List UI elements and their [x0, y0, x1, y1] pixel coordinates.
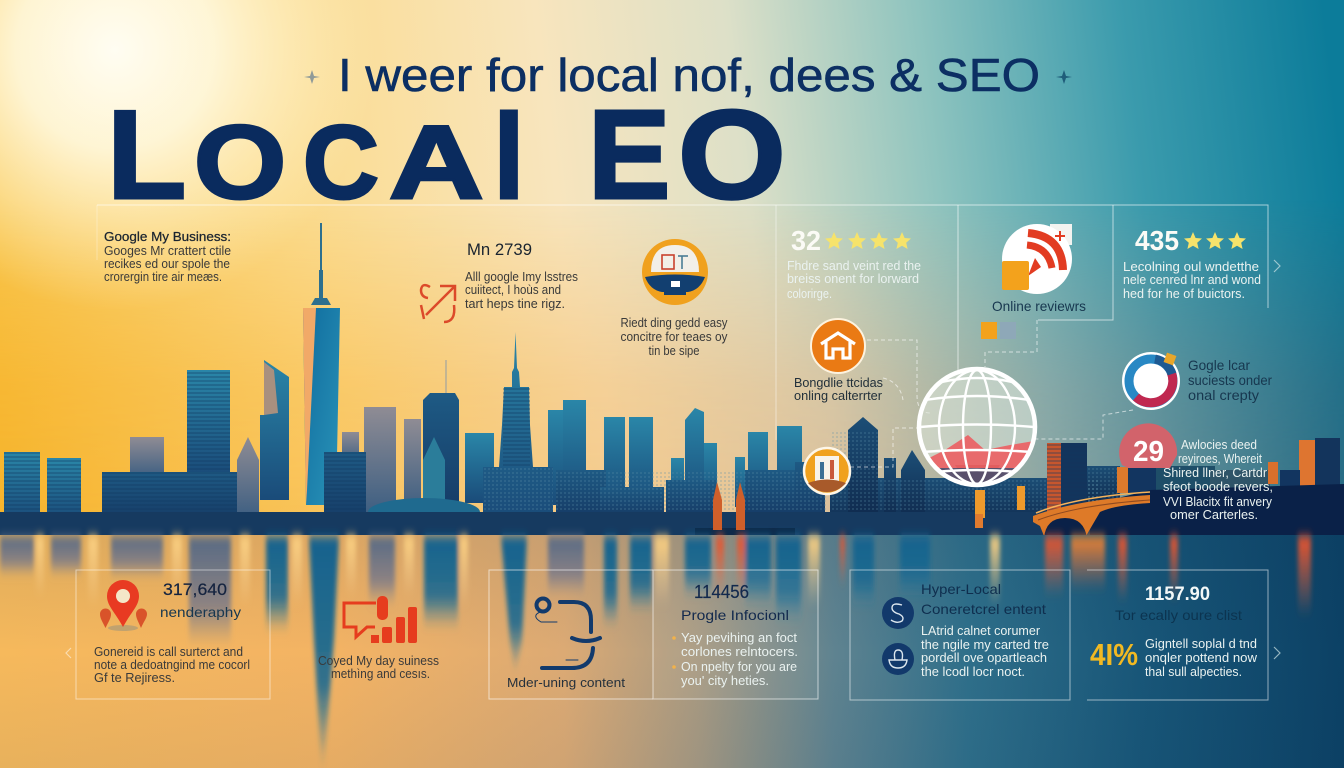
bottom panel: hyper-local content: pordell ove opartleach — [921, 651, 1047, 665]
donut icon — [1122, 352, 1180, 410]
panel: 435 stars — [1123, 225, 1261, 301]
panel: 29 stat — [1119, 423, 1273, 522]
bottom panel: bars and chat icon: Coyed My day suiness — [318, 654, 439, 668]
icon: monitor — [642, 239, 708, 305]
panel: Mn 2739 stat — [421, 240, 578, 322]
bottom panel: 114456 — [653, 570, 818, 699]
panel: 435 stars: hed for he of buictors. — [1123, 287, 1245, 301]
orange spires — [713, 482, 1025, 530]
bottom panel: bars and chat icon — [318, 596, 439, 681]
panel: online reviews — [981, 224, 1086, 339]
lit buildings right — [1047, 438, 1340, 513]
stat circle — [1119, 423, 1177, 468]
bottom panel: local map pins: 317,640 — [163, 580, 227, 599]
panel: donut chart with caption: onal crepty — [1188, 387, 1259, 403]
bottom panel: local map pins: Gonereid is call surterct and — [94, 645, 243, 659]
right city — [830, 417, 1270, 528]
title line: I weer for local nof, dees & SEO — [338, 49, 1040, 101]
mid buildings — [102, 360, 459, 518]
main heading: C — [303, 104, 379, 221]
bottom panel: 1157.90: Gigntell soplal d tnd — [1145, 637, 1257, 651]
tower with antenna — [483, 332, 553, 517]
ground band — [0, 512, 1344, 536]
bottom panel: 114456: corlones relntocers. — [681, 645, 798, 659]
panel: donut chart with caption: Gogle lcar — [1188, 357, 1250, 373]
panel: 29 stat: VVI Blacitx fit anvery — [1163, 495, 1273, 509]
bottom panel: 114456: Progle Infocionl — [681, 607, 789, 623]
panel: 32 stars: breiss onent for lorward — [787, 272, 919, 286]
bottom panel: 114456: 114456 — [694, 582, 749, 602]
bottom panel: 1157.90: Tor ecally oure clist — [1115, 607, 1242, 623]
icon: stars — [825, 232, 911, 249]
icon: right chevron — [1274, 260, 1280, 272]
bottom panel: local map pins: note a dedoatngind me cocorl — [94, 658, 250, 672]
panel: house icon with caption: Bongdlie ttcidas — [794, 376, 883, 390]
panel: 29 stat: Awlocies deed — [1181, 438, 1257, 452]
panel: 29 stat: omer Carterles. — [1170, 508, 1258, 522]
panel: 29 stat: sfeot boode revers, — [1163, 480, 1273, 494]
icon: house — [811, 319, 865, 373]
panel: Mn 2739 stat: cuiitect, I hoùs and — [465, 283, 561, 297]
skyline — [0, 223, 1344, 538]
bottom panel: 1157.90: onqler pottend now — [1145, 651, 1258, 665]
bottom panel: 1157.90 — [1087, 570, 1268, 700]
right sparkle — [1056, 70, 1072, 84]
bottom panel: local map pins: Gf te Rejiress. — [94, 671, 175, 685]
panel: 32 stars: 32 — [791, 225, 821, 256]
bottom panel: bars and chat icon: methìng and cesıs. — [331, 667, 430, 681]
panel: Google My Business: Google My Business: — [104, 229, 231, 244]
panel: 435 stars: nele cenred lnr and wond — [1123, 273, 1261, 287]
water reflection — [0, 535, 1344, 768]
panel: Mn 2739 stat: tart heps tine rigz. — [465, 297, 565, 311]
bridge — [1033, 492, 1150, 538]
bottom panel: 1157.90: 1157.90 — [1145, 584, 1210, 605]
panel: 32 stars — [787, 225, 921, 301]
main heading: O — [678, 85, 786, 226]
panel: 435 stars: 435 — [1135, 225, 1179, 256]
icon: columns badge — [804, 448, 850, 494]
icon: stars — [1184, 232, 1246, 249]
lower centre blocks — [556, 462, 825, 514]
bottom panel: local map pins — [76, 570, 270, 699]
panel: monitor icon with caption — [620, 239, 728, 358]
icon: circle S — [882, 597, 914, 629]
icon: content hook — [536, 598, 600, 668]
panel: monitor icon with caption: Riedt ding gedd easy — [620, 316, 728, 330]
panel: 435 stars: Lecolning oul wndetthe — [1123, 260, 1259, 274]
bottom panel: 114456: On npelty for you are — [681, 660, 797, 674]
bullets — [672, 636, 676, 669]
bottom panel: content icon: Mder-uning content — [507, 675, 625, 690]
bottom panel: hyper-local content — [850, 570, 1070, 700]
tall tower with spire — [303, 223, 340, 505]
bottom panel: hyper-local content: the ngile my carted tre — [921, 638, 1049, 652]
panel: online reviews: Online reviewrs — [992, 298, 1086, 314]
panel: Mn 2739 stat: Alll google Imy lsstres — [465, 270, 578, 284]
panel: 32 stars: colorirge. — [787, 287, 832, 301]
shard tower — [260, 360, 289, 500]
icon: online reviews badge — [1002, 224, 1072, 294]
icon: bottom right chevron — [1274, 647, 1280, 659]
bottom panel: 114456: you' city heties. — [681, 674, 769, 688]
panel: house icon with caption — [794, 319, 883, 403]
icon: red arrows — [421, 285, 455, 322]
panel: 29 stat: Shired llner, Cartdr — [1163, 466, 1267, 480]
main heading: I — [494, 84, 524, 225]
bottom panel: 114456: Yay pevihing an foct — [681, 631, 798, 645]
panel: Google My Business: crorergin tire air meæs. — [104, 270, 222, 284]
panel: monitor icon with caption: tin be sipe — [648, 344, 700, 358]
frame lines and connectors — [97, 205, 1268, 467]
panel: monitor icon with caption: concitre for teaes oy — [620, 330, 728, 344]
panel: donut chart with caption: suciests onder — [1188, 372, 1272, 388]
bottom panel: hyper-local content: Hyper-Local — [921, 581, 1001, 597]
main heading: E — [588, 85, 670, 225]
panel: Google My Business: Googes Mr crattert ctile — [104, 244, 231, 258]
bottom panel: hyper-local content: LAtrid calnet corumer — [921, 624, 1040, 638]
icon: map pins — [100, 580, 147, 631]
globe — [919, 369, 1040, 490]
icon: circle person — [882, 643, 914, 675]
bottom panel: 1157.90: thal sull alpecties. — [1145, 665, 1242, 679]
main heading: O — [194, 104, 286, 220]
stat circle: 29 — [1133, 436, 1164, 468]
main heading: L — [107, 85, 186, 226]
main heading — [107, 84, 786, 226]
panel: Google My Business: recikes ed our spole the — [104, 257, 230, 271]
panel: Mn 2739 stat: Mn 2739 — [467, 240, 532, 259]
panel: 29 stat: reyiroes, Whereit — [1178, 452, 1262, 466]
icon: bottom left chevron — [66, 648, 71, 658]
legend swatches — [981, 322, 1016, 339]
panel: house icon with caption: onling calterrter — [794, 389, 882, 403]
bottom panel: hyper-local content: Coneretcrel entent — [921, 601, 1046, 617]
icon: chat bubble with bars — [344, 596, 417, 643]
main heading: A — [389, 105, 484, 221]
panel: donut chart with caption — [1122, 352, 1272, 410]
bottom panel: 1157.90: 4I% — [1090, 637, 1138, 672]
bottom panel: content icon — [489, 570, 653, 699]
bottom panel: hyper-local content: the lcodl locr noct. — [921, 665, 1025, 679]
background sky — [0, 0, 1344, 540]
bottom panel: local map pins: nenderaphy — [160, 604, 241, 620]
panel: 32 stars: Fhdre sand veint red the — [787, 259, 921, 273]
left sparkle — [304, 70, 320, 84]
panel: Google My Business — [104, 229, 231, 284]
